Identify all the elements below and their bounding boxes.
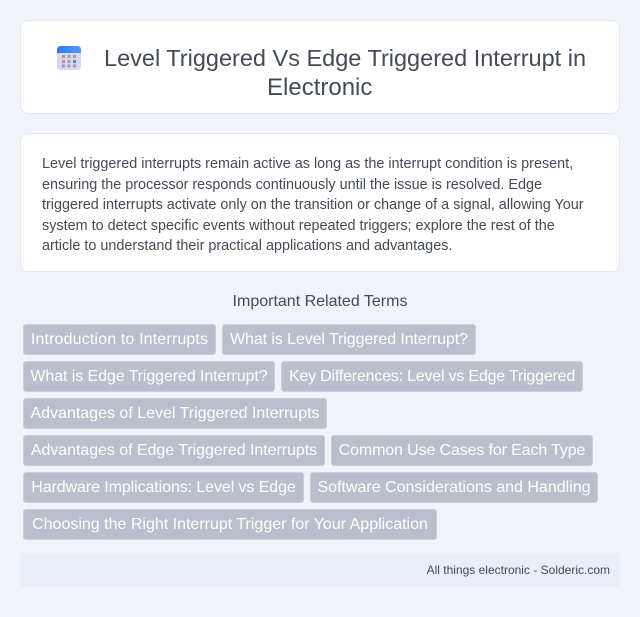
text block: introduction paragraph: ensuring the processor responds continuously until the issue is resolved. Edge — [42, 176, 542, 192]
tag — [23, 361, 275, 392]
tag: Hardware Implications: Level vs Edge — [31, 479, 296, 496]
text block: introduction paragraph: Level triggered interrupts remain active as long as the interrupt condition is present, — [42, 156, 573, 172]
tag: What is Level Triggered Interrupt? — [230, 331, 468, 348]
tag — [331, 435, 593, 466]
heading: important related terms: Important Related Terms — [233, 293, 407, 310]
title: Electronic — [267, 74, 372, 101]
icon: calendar — [57, 46, 81, 70]
tag — [222, 324, 476, 355]
tag — [23, 472, 304, 503]
tag — [310, 472, 598, 503]
tag — [23, 398, 327, 429]
title — [104, 45, 586, 101]
footer — [20, 553, 620, 587]
footer credit: All things electronic - Solderic.com — [427, 563, 610, 577]
tag: Advantages of Level Triggered Interrupts — [30, 405, 320, 422]
tag — [23, 435, 325, 466]
tag: Software Considerations and Handling — [317, 479, 591, 496]
tag: Advantages of Edge Triggered Interrupts — [31, 442, 317, 459]
panel: title card — [20, 20, 620, 114]
tag — [23, 324, 216, 355]
panel: related term tags — [23, 324, 598, 540]
tag: Common Use Cases for Each Type — [339, 442, 585, 459]
text block: introduction paragraph: article to understand their practical applications and advantages. — [42, 238, 452, 254]
tag: Choosing the Right Interrupt Trigger for Your Application — [32, 516, 428, 533]
tag: Key Differences: Level vs Edge Triggered — [289, 368, 575, 385]
text block: introduction paragraph: system to detect specific events without repeated triggers; explore the rest of the — [42, 218, 555, 234]
panel: introduction — [20, 133, 620, 272]
tag: Introduction to Interrupts — [31, 331, 208, 348]
tag: What is Edge Triggered Interrupt? — [30, 368, 268, 385]
tag — [23, 509, 437, 540]
tag — [281, 361, 583, 392]
title: Level Triggered Vs Edge Triggered Interrupt in — [104, 45, 586, 71]
text block: introduction paragraph — [42, 156, 584, 254]
text block: introduction paragraph: triggered interrupts activate only on the transition or change of a signal, allowing Your — [42, 197, 584, 213]
